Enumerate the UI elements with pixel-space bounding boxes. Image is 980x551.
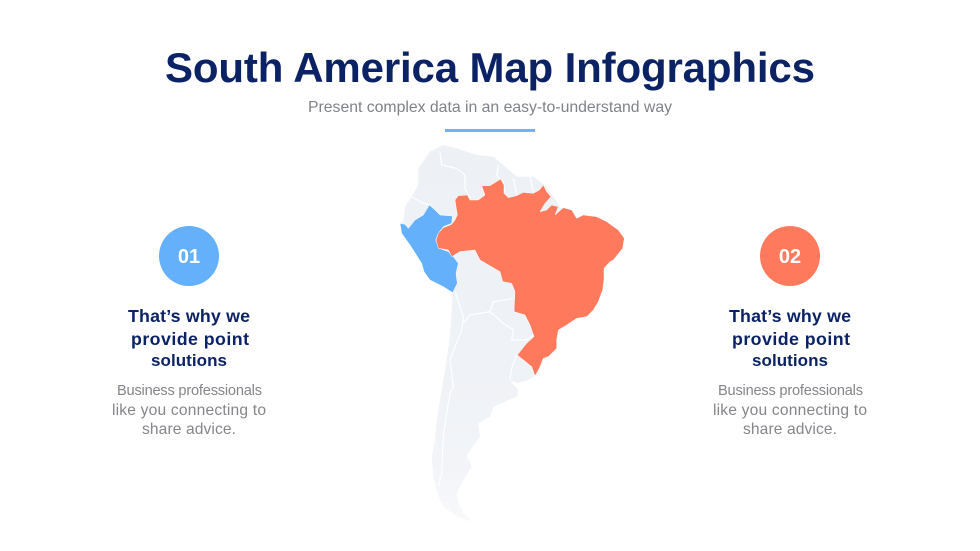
map: Peru <box>400 205 458 293</box>
heading: item 01: That’s why we <box>128 306 250 326</box>
text: item 01 description <box>112 383 266 438</box>
icon: number badge 02: 02 <box>779 246 801 268</box>
heading: item 02: provide point <box>732 329 850 349</box>
heading: item 01: provide point <box>131 329 249 349</box>
text: item 01 description: like you connecting to <box>112 402 266 419</box>
text: item 01 description: Business professionals <box>117 383 262 399</box>
panel: item 01 <box>112 226 266 438</box>
text: item 02 description: share advice. <box>743 421 837 438</box>
heading: item 01 <box>128 306 250 370</box>
text: item 01 description: share advice. <box>142 421 236 438</box>
heading: item 02: solutions <box>752 351 828 370</box>
text: item 02 description: Business professionals <box>718 383 863 399</box>
icon: number badge 01: 01 <box>178 246 200 268</box>
title: South America Map Infographics <box>165 44 815 91</box>
panel: item 02 <box>713 226 867 438</box>
text: item 02 description: like you connecting to <box>713 402 867 419</box>
title accent bar <box>445 129 535 132</box>
icon: number badge 02 <box>760 226 820 286</box>
map: South America <box>400 145 624 522</box>
text: item 02 description <box>713 383 867 438</box>
map: Brazil <box>436 179 624 376</box>
heading: item 01: solutions <box>151 351 227 370</box>
heading: item 02 <box>729 306 851 370</box>
subtitle: Present complex data in an easy-to-understand way <box>308 99 672 116</box>
icon: number badge 01 <box>159 226 219 286</box>
heading: item 02: That’s why we <box>729 306 851 326</box>
map: country borders <box>412 152 533 487</box>
map: other countries <box>400 145 593 522</box>
